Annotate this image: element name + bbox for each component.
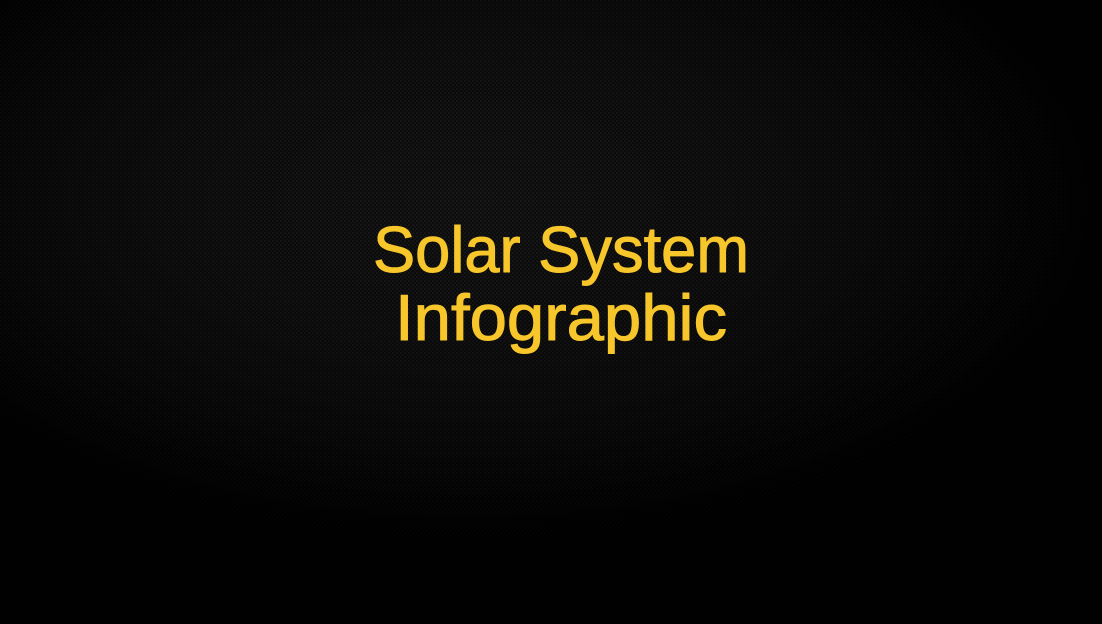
title: Infographic xyxy=(395,281,727,354)
title xyxy=(373,213,749,354)
textured dark background with title xyxy=(0,0,998,486)
title: Solar System xyxy=(373,213,749,286)
